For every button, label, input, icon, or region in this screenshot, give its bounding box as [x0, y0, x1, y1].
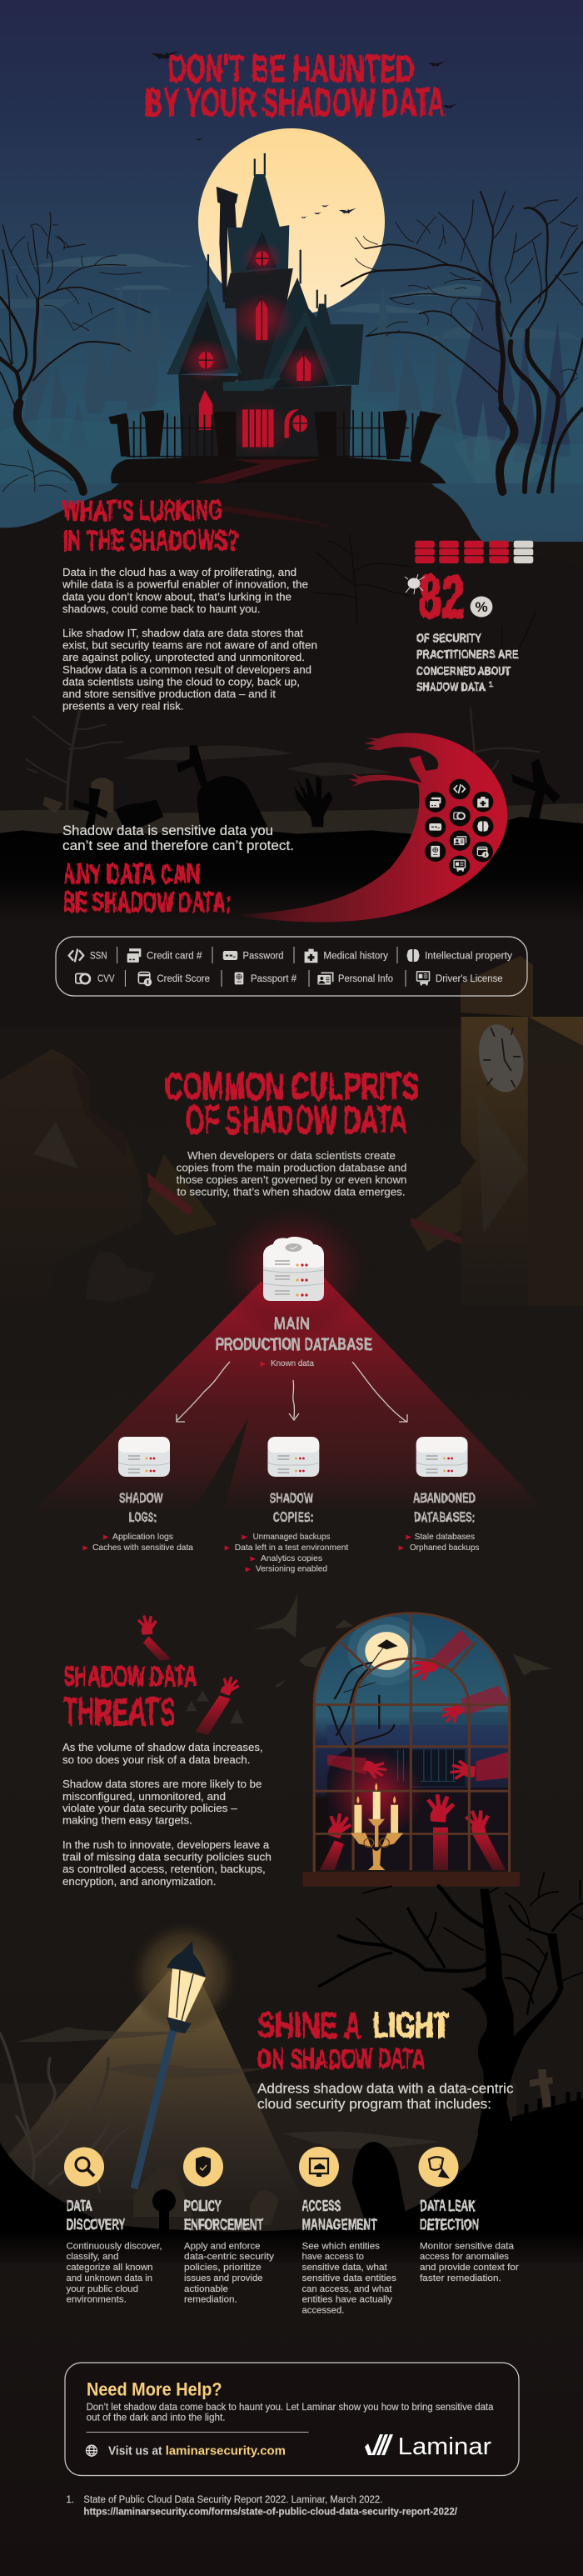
column: policy enforcement	[183, 2147, 274, 2305]
heading: what's lurking: WHAT'S LURKING	[62, 495, 223, 527]
column: policy enforcement: issues and provide	[184, 2273, 263, 2283]
label: main production database: PRODUCTION DATABASE	[216, 1335, 372, 1354]
text block: intro: while data is a powerful enabler of innovation, the	[62, 579, 308, 591]
footnote: 1.	[67, 2495, 74, 2505]
column: data discovery: and unknown data in	[67, 2273, 152, 2283]
column: policy enforcement: POLICY	[184, 2198, 222, 2214]
cross	[530, 2069, 553, 2107]
faint trees and clouds	[0, 2033, 133, 2200]
panel: data types: Medical history	[323, 952, 388, 962]
column: shadow logs: LOGS:	[129, 1509, 157, 1525]
footnote	[67, 2495, 458, 2517]
text block: threats: making them easy targets.	[62, 1815, 192, 1827]
panel: data types: Passport #	[251, 974, 297, 984]
column: access management: See which entities	[301, 2241, 380, 2251]
text block: threats: so too does your risk of a data breach.	[62, 1754, 250, 1766]
icon: five databases	[415, 541, 533, 563]
panel: data types: Intellectual property	[425, 952, 512, 962]
footnote: State of Public Cloud Data Security Report 2022. Laminar, March 2022.	[83, 2495, 382, 2505]
glowing windows	[242, 242, 282, 275]
icon: spider	[405, 574, 425, 594]
label: main production database	[216, 1314, 372, 1354]
heading: shine a light: ON SHADOW DATA	[257, 2043, 426, 2074]
stat caption	[416, 632, 518, 694]
column: access management: ACCESS	[301, 2198, 341, 2214]
graves	[133, 2165, 279, 2225]
column: shadow copies: Unmanaged backups	[253, 1532, 330, 1542]
icon: leaking barrel	[418, 2147, 458, 2187]
column: shadow copies: Data left in a test environment	[235, 1543, 348, 1553]
column: policy enforcement: actionable	[184, 2284, 228, 2294]
black ground	[0, 2115, 583, 2263]
number: 82	[418, 564, 465, 631]
lamp glow	[127, 1918, 241, 2032]
stat caption: SHADOW DATA	[416, 680, 486, 694]
column: abandoned databases: Stale databases	[415, 1532, 475, 1542]
column: data leak detection: DATA LEAK	[420, 2198, 476, 2214]
column: data discovery: DISCOVERY	[67, 2217, 125, 2233]
percent badge	[471, 597, 492, 617]
icon: shield	[183, 2147, 223, 2187]
column: abandoned databases: ABANDONED	[413, 1490, 476, 1506]
column: access management: can access, and what	[301, 2284, 392, 2294]
text block: intro: Data in the cloud has a way of proliferating, and	[62, 567, 296, 578]
text: sensitive data statement: Shadow data is sensitive data you	[62, 823, 273, 838]
column: shadow logs	[83, 1437, 193, 1553]
text block: culprits intro	[177, 1150, 406, 1198]
ghost crescent	[234, 733, 507, 922]
visit link: laminarsecurity.com	[166, 2443, 286, 2458]
help heading: Need More Help?	[87, 2378, 222, 2399]
text block: culprits intro: those copies aren’t governed by or even known	[177, 1174, 406, 1186]
logo: Laminar: Laminar	[398, 2433, 491, 2460]
panel: common culprits background	[0, 1017, 583, 1512]
heading: common culprits: OF SHADOW DATA	[185, 1098, 407, 1142]
title: DON'T BE HAUNTED	[168, 48, 414, 90]
window frame	[314, 1613, 510, 1872]
bare tree: right	[341, 192, 583, 492]
text block: intro: data scientists using the cloud to copy, back up,	[62, 676, 300, 688]
text block: intro: Shadow data is a common result of developers and	[62, 664, 311, 676]
text block: threats: as controlled access, retention, backups,	[62, 1863, 266, 1875]
heading: shadow data threats: THREATS	[62, 1690, 176, 1733]
heading: shadow data threats	[62, 1661, 197, 1733]
heading: common culprits	[164, 1065, 419, 1142]
text block: threats: encryption, and anonymization.	[62, 1876, 216, 1888]
text block: culprits intro: When developers or data scientists create	[187, 1150, 396, 1162]
text block: intro	[62, 567, 317, 712]
title	[145, 48, 446, 124]
column: access management: sensitive data entities	[301, 2273, 396, 2283]
column: policy enforcement: policies, prioritize	[184, 2263, 262, 2273]
column: policy enforcement: Apply and enforce	[184, 2241, 260, 2251]
help text: Don’t let shadow data come back to haunt you. Let Laminar show you how to bring sensitive data	[87, 2403, 494, 2413]
fence and ground	[108, 410, 441, 463]
heading: common culprits: COMMON CULPRITS	[164, 1065, 419, 1108]
fence silhouette	[512, 2098, 583, 2125]
column: data leak detection: access for anomalies	[420, 2252, 509, 2262]
column: access management	[299, 2147, 396, 2315]
heading: shine a light: SHINE A	[257, 2005, 362, 2046]
heading: any data can be shadow data: ANY DATA CAN	[62, 858, 200, 890]
column: data leak detection	[418, 2147, 519, 2283]
ground edge	[0, 483, 583, 1028]
text block: threats: violate your data security policies –	[62, 1803, 237, 1814]
text block: threats: trail of missing data security policies such	[62, 1852, 272, 1863]
help text	[87, 2403, 494, 2423]
column: data discovery: environments.	[67, 2295, 127, 2305]
night sky	[0, 0, 583, 542]
panel: need more help	[65, 2363, 519, 2475]
stat caption: OF SECURITY	[416, 632, 481, 646]
percent badge: %	[475, 599, 488, 615]
heading: what's lurking	[62, 495, 239, 557]
grandfather clock	[461, 1017, 583, 1306]
text block: threats	[62, 1742, 272, 1888]
text block: threats: misconfigured, unmonitored, and	[62, 1791, 226, 1803]
icon: magnifier	[64, 2147, 104, 2187]
footnote: https://laminarsecurity.com/forms/state-of-public-cloud-data-security-report-2022/	[83, 2507, 458, 2517]
column: shadow copies: SHADOW	[270, 1490, 314, 1506]
books	[147, 1154, 461, 1252]
window interior	[314, 1610, 511, 1873]
panel: data types: Personal Info	[338, 974, 393, 984]
column: shadow logs: Caches with sensitive data	[92, 1543, 193, 1553]
text block: threats: Shadow data stores are more likely to be	[62, 1778, 262, 1790]
visit link	[108, 2443, 286, 2458]
heading: any data can be shadow data: BE SHADOW DATA:	[62, 887, 232, 918]
bullet: known data: Known data	[271, 1358, 314, 1368]
logo: Laminar	[365, 2433, 491, 2460]
red beam	[33, 1277, 546, 1512]
column: shadow copies	[225, 1437, 348, 1574]
column: data leak detection: and provide context for	[420, 2263, 519, 2273]
text: sensitive data statement: can’t see and therefore can’t protect.	[62, 838, 294, 853]
label: main production database: MAIN	[274, 1314, 310, 1333]
background: wardrobe box corner	[461, 956, 533, 1017]
text block: culprits intro: to security, that’s when shadow data emerges.	[177, 1187, 406, 1198]
panel: data types	[56, 937, 527, 996]
column: access management: have access to	[301, 2252, 364, 2262]
column: access management: entities have actually	[301, 2295, 392, 2305]
bare tree: left	[0, 213, 150, 492]
scene drawing	[0, 51, 583, 483]
data icon bubbles	[425, 779, 493, 876]
column: data discovery: Continuously discover,	[67, 2241, 162, 2251]
window sill	[302, 1872, 520, 1887]
arrows to shadow stores	[177, 1362, 407, 1422]
panel: what's lurking background	[0, 483, 583, 1028]
text block: threats: In the rush to innovate, developers leave a	[62, 1839, 269, 1851]
panel: threats illustration	[137, 1593, 552, 1887]
column: access management: accessed.	[301, 2305, 344, 2315]
stat caption: CONCERNED ABOUT	[416, 664, 511, 678]
visit link: Visit us at	[108, 2443, 162, 2458]
stat caption: PRACTITIONERS ARE	[416, 648, 518, 662]
column: data discovery: classify, and	[67, 2252, 118, 2262]
stat: 82 percent	[405, 541, 533, 694]
column: shadow logs: SHADOW	[119, 1490, 163, 1506]
column: data leak detection: faster remediation.	[420, 2273, 501, 2283]
tombstones	[73, 745, 333, 833]
hands through the window	[320, 1629, 510, 1870]
column: policy enforcement: remediation.	[184, 2295, 237, 2305]
text: program intro	[257, 2081, 514, 2112]
text: program intro: Address shadow data with a data-centric	[257, 2081, 514, 2097]
stat caption: 1	[489, 680, 493, 688]
icon: globe	[87, 2445, 97, 2456]
text block: intro: shadows, could come back to haunt you.	[62, 603, 260, 615]
panel: data types: Credit card #	[147, 952, 202, 962]
icon: monitor	[299, 2147, 339, 2187]
column: data leak detection: Monitor sensitive data	[420, 2241, 515, 2251]
text: program intro: cloud security program that includes:	[257, 2096, 491, 2112]
text block: intro: exist, but security teams are not aware of and often	[62, 639, 317, 651]
text block: intro: and store sensitive production data – and it	[62, 688, 277, 700]
candelabra	[351, 1783, 403, 1870]
panel: data types: Driver's License	[436, 974, 503, 984]
heading: any data can be shadow data	[62, 858, 232, 918]
bats around window	[253, 1593, 552, 1688]
column: policy enforcement: ENFORCEMENT	[184, 2217, 263, 2233]
panel: data types: SSN	[90, 952, 107, 962]
column: access management: MANAGEMENT	[301, 2217, 377, 2233]
lamp head	[167, 1941, 206, 2033]
column: data leak detection: DETECTION	[420, 2217, 479, 2233]
column: abandoned databases: DATABASES:	[414, 1509, 475, 1525]
lamp post	[134, 2008, 178, 2188]
heading: shine a light	[257, 2005, 449, 2074]
heading: what's lurking: IN THE SHADOWS?	[62, 525, 239, 557]
bats	[151, 51, 180, 59]
column: policy enforcement: data-centric security	[184, 2252, 274, 2262]
panel: hero haunted house scene	[0, 0, 583, 542]
text block: threats: As the volume of shadow data increases,	[62, 1742, 263, 1753]
graveyard backdrop	[0, 2083, 516, 2242]
column: abandoned databases	[399, 1437, 479, 1553]
text: sensitive data statement	[62, 823, 294, 853]
text block: intro: are against policy, unprotected and unmonitored.	[62, 652, 305, 663]
panel: shine a light scene	[0, 1873, 583, 2263]
icon: main server	[263, 1237, 324, 1301]
panel: data types: CVV	[97, 974, 115, 984]
text block: intro: Like shadow IT, shadow data are data stores that	[62, 628, 304, 639]
big bare tree	[319, 1873, 583, 2133]
column: data discovery: categorize all known	[67, 2263, 153, 2273]
faint graveyard trees	[26, 701, 539, 813]
moon	[198, 128, 385, 315]
heading: shadow data threats: SHADOW DATA	[62, 1661, 197, 1693]
column: data discovery: DATA	[67, 2198, 92, 2214]
chimney	[217, 187, 238, 303]
column: data discovery	[64, 2147, 162, 2305]
chair	[0, 1049, 154, 1306]
text block: intro: presents a very real risk.	[62, 700, 183, 712]
column: shadow copies: Analytics copies	[261, 1553, 322, 1563]
red hand and warnings outside window	[137, 1613, 243, 1735]
column: shadow copies: COPIES:	[273, 1509, 314, 1525]
window tree	[327, 1643, 394, 1755]
text block: intro: data you don’t know about, that’s lurking in the	[62, 591, 292, 603]
panel: data types: Credit Score	[157, 974, 210, 984]
heading: shine a light: LIGHT	[373, 2005, 449, 2046]
panel: data types: Password	[243, 952, 283, 962]
column: shadow copies: Versioning enabled	[256, 1564, 327, 1574]
ground band	[0, 803, 583, 844]
column: access management: sensitive data, what	[301, 2263, 388, 2273]
help text: out of the dark and into the light.	[87, 2413, 225, 2423]
text block: culprits intro: copies from the main production database and	[177, 1163, 406, 1174]
column: abandoned databases: Orphaned backups	[410, 1543, 479, 1553]
column: data discovery: your public cloud	[67, 2284, 138, 2294]
column: shadow logs: Application logs	[112, 1532, 173, 1542]
lamp beam	[0, 1971, 302, 2200]
